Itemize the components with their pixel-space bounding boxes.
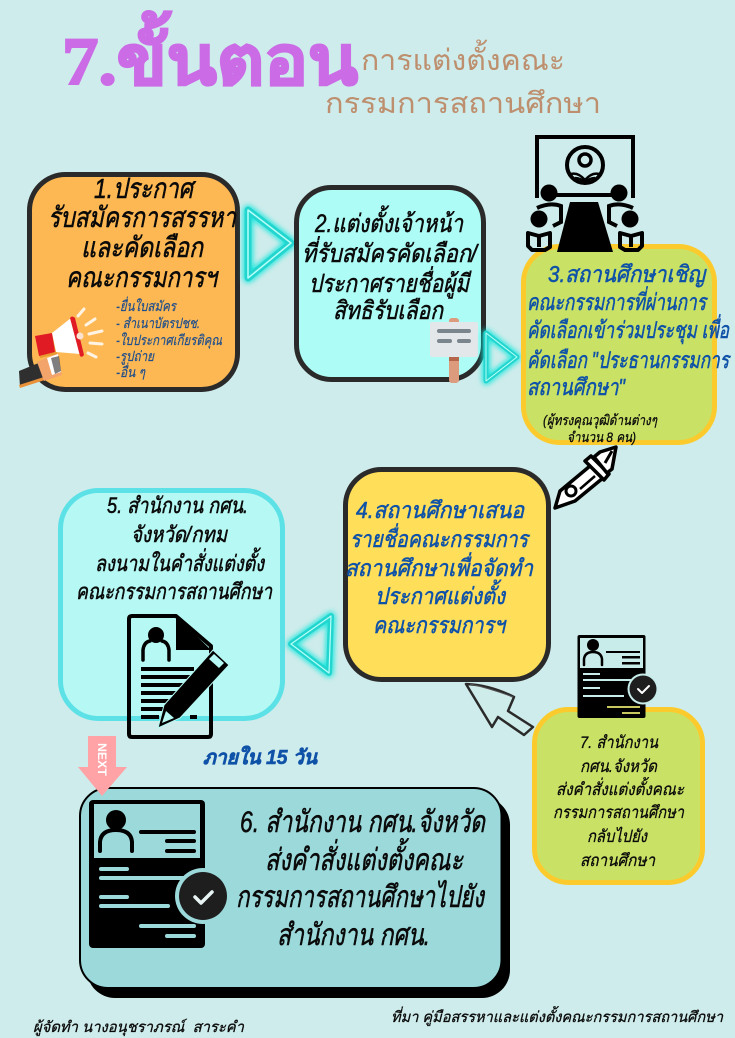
step 3 text: สถานศึกษา" [527,374,626,400]
title: subheading line 1: การแต่งตั้งคณะ [361,39,565,77]
step 4 text: คณะกรรมการฯ [373,612,507,638]
step 6 text: สำนักงาน กศน. [277,919,430,952]
step 3 note [543,412,658,445]
step 1 heading: 1.ประกาศ [94,173,196,204]
deadline label: ภายใน 15 วัน [203,745,318,769]
step 2 text: 2.แต่งตั้งเจ้าหน้า [314,205,464,238]
step 2 text: ที่รับสมัครคัดเลือก/ [302,236,480,268]
step 5 text: ลงนามในคำสั่งแต่งตั้ง [95,547,266,576]
step 1 document list: -ยื่นใบสมัคร [116,296,177,314]
title: main heading: 7.ขั้นตอน [62,10,358,99]
title [62,10,601,120]
arrow: next down [78,736,127,796]
footer: source: ที่มา คู่มือสรรหาและแต่งตั้งคณะกรรมการสถานศึกษา [391,1006,724,1026]
footer: author: ผู้จัดทำ นางอนุชราภรณ์ สาระคำ [33,1018,245,1036]
step 4 text: สถานศึกษาเพื่อจัดทำ [345,552,534,581]
arrow: neon triangle 2 to 3 [486,333,517,381]
panel: step 6 [80,788,510,998]
arrow: next down: NEXT [95,743,109,777]
step 7 text: กรรมการสถานศึกษา [553,803,684,822]
panel: step 3 [524,246,731,445]
step 7 text: กศน.จังหวัด [580,757,658,776]
step 1 heading: คณะกรรมการฯ [66,262,219,293]
step 1 document list [116,296,223,380]
step 5 text: จังหวัด/กทม [131,522,228,547]
step 1 document list: -อื่น ๆ [116,362,146,380]
panel: step 4 [345,470,548,680]
title: subheading line 2: กรรมการสถานศึกษา [325,88,601,120]
icon: sign board [430,318,478,383]
icon: approved document small [578,635,658,718]
step 1 document list: -รูปถ่าย [116,348,155,365]
step 3 note: จำนวน 8 คน) [567,429,636,445]
step 5 text: 5. สำนักงาน กศน. [107,493,248,518]
step 1 heading [48,173,237,293]
icon: meeting room [528,137,642,252]
step 1 heading: รับสมัครการสรรหา [48,202,237,233]
icon: megaphone in hand [19,309,102,388]
icon: approved document large [89,800,231,948]
step 4 text: 4.สถานศึกษาเสนอ [356,497,525,523]
step 1 document list: - สำเนาบัตรปชช. [116,315,200,331]
step 7 text: ส่งคำสั่งแต่งตั้งคณะ [556,776,685,799]
icon: document and pencil [129,616,229,737]
panel: step 5 [60,490,282,737]
arrow: neon triangle 4 to 5 [291,616,331,673]
step 4 text: รายชื่อคณะกรรมการ [350,523,530,552]
step 5 text: คณะกรรมการสถานศึกษา [76,579,273,604]
step 7 text: กลับไปยัง [587,826,648,846]
step 1 heading: และคัดเลือก [81,232,205,263]
step 1 document list: -ใบประกาศเกียรติคุณ [116,332,223,349]
step 2 text: ประกาศรายชื่อผู้มี [309,266,472,299]
step 5 text [76,493,273,604]
step 7 text: 7. สำนักงาน [580,733,658,752]
arrow: neon triangle 1 to 2 [248,210,291,278]
panel: step 2 [296,188,484,383]
icon: pen [555,447,616,508]
step 4 text [345,497,534,638]
step 6 text: 6. สำนักงาน กศน.จังหวัด [240,806,486,839]
step 3 note: (ผู้ทรงคุณวุฒิด้านต่างๆ [543,412,658,429]
step 6 text: ส่งคำสั่งแต่งตั้งคณะ [265,838,464,877]
panel: step 7 [534,710,702,882]
step 7 text: สถานศึกษา [580,851,655,870]
arrow: hand-drawn cursor to step 4 [466,684,533,735]
panel: step 1 [19,173,238,390]
step 2 text [302,205,480,325]
step 2 text: สิทธิรับเลือก [333,297,445,325]
step 7 text [553,733,685,870]
step 3 text: 3.สถานศึกษาเชิญ [548,261,707,288]
step 6 text [236,806,486,952]
step 4 text: ประกาศแต่งตั้ง [375,579,507,609]
step 6 text: กรรมการสถานศึกษาไปยัง [236,880,486,914]
step 3 text [527,261,731,400]
